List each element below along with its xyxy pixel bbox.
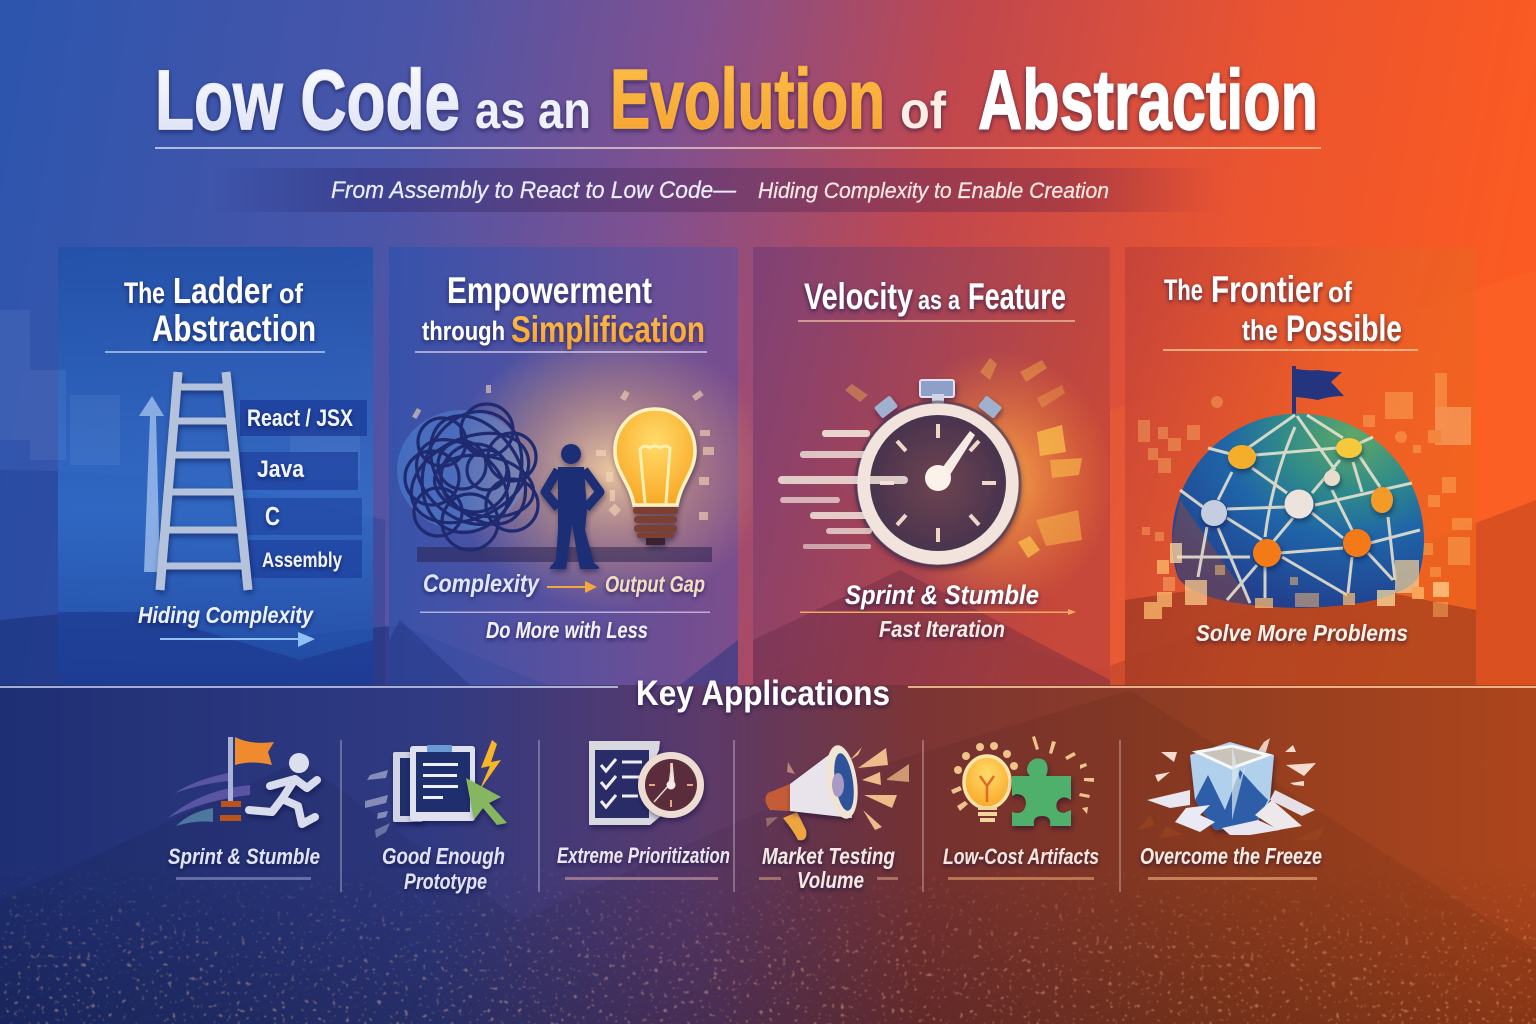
item: good enough prototype xyxy=(365,740,507,894)
item: market testing volume xyxy=(759,743,909,893)
item: low-cost artifacts xyxy=(943,736,1099,880)
heading: Feature xyxy=(968,276,1066,317)
panel: empowerment xyxy=(389,247,770,685)
label: Market Testing xyxy=(762,843,895,869)
title: of xyxy=(900,82,947,140)
label: Solve More Problems xyxy=(1196,620,1408,646)
pixel squares front xyxy=(1144,543,1449,619)
subtitle: Hiding Complexity to Enable Creation xyxy=(758,178,1109,203)
label xyxy=(382,843,505,894)
heading xyxy=(1164,269,1402,349)
heading: Abstraction xyxy=(152,308,316,349)
icon: cracked ice cube xyxy=(1138,738,1325,840)
icon: checklist and clock xyxy=(589,741,704,825)
label: hiding complexity: Hiding Complexity xyxy=(138,602,314,628)
heading xyxy=(422,270,705,350)
speed lines xyxy=(778,430,908,549)
shards xyxy=(845,358,1082,558)
pixel squares back xyxy=(1138,373,1472,577)
flag xyxy=(1292,366,1344,414)
labels: Complexity xyxy=(423,570,540,598)
subtitle: From Assembly to React to Low Code— xyxy=(331,177,737,204)
heading: of xyxy=(1328,277,1352,309)
title: Abstraction xyxy=(978,53,1318,147)
icon: stopwatch xyxy=(856,380,1020,566)
rung labels: C xyxy=(265,501,280,531)
label: Low-Cost Artifacts xyxy=(943,844,1099,869)
label: Extreme Prioritization xyxy=(557,843,730,868)
subtitle xyxy=(210,168,1220,212)
sparkles xyxy=(412,385,714,520)
panel: frontier xyxy=(1125,247,1476,685)
rung labels xyxy=(240,400,367,578)
item: extreme prioritization xyxy=(557,741,730,880)
rung labels: Java xyxy=(257,456,305,483)
icon: globe xyxy=(1172,366,1424,608)
heading: Ladder xyxy=(173,270,272,311)
ground band xyxy=(417,547,712,562)
heading: through xyxy=(422,316,505,346)
item: overcome the freeze xyxy=(1138,738,1325,880)
heading: Frontier xyxy=(1211,269,1323,310)
title: as an xyxy=(475,82,591,140)
heading: Possible xyxy=(1286,308,1402,349)
label: Sprint & Stumble xyxy=(168,844,320,869)
label: Overcome the Freeze xyxy=(1140,843,1322,869)
icon: clipboard xyxy=(365,740,507,838)
arrow xyxy=(160,632,315,647)
label: Volume xyxy=(797,867,864,893)
section: key applications xyxy=(0,674,1536,894)
icon: up arrow xyxy=(139,396,164,572)
title xyxy=(155,52,1318,147)
heading: Simplification xyxy=(511,309,705,350)
heading xyxy=(124,270,316,349)
nodes xyxy=(1201,438,1393,567)
labels: Sprint & Stumble xyxy=(845,580,1039,610)
label xyxy=(762,843,895,893)
heading: Key Applications xyxy=(636,674,890,713)
panel: empowerment: Do More with Less xyxy=(486,617,648,643)
icon: tangle xyxy=(397,397,545,550)
panel: velocity: Fast Iteration xyxy=(879,616,1005,642)
heading: The xyxy=(1164,274,1203,307)
icon: bulb and puzzle xyxy=(951,736,1094,826)
rung labels: React / JSX xyxy=(247,405,353,432)
heading: as a xyxy=(918,285,961,315)
icon: light bulb xyxy=(615,409,695,545)
panel: ladder of abstraction xyxy=(0,247,373,685)
heading: the xyxy=(1242,315,1278,347)
label: Prototype xyxy=(404,869,487,894)
icon: person xyxy=(545,444,600,569)
heading: Velocity xyxy=(804,276,913,317)
icon: runner and flag xyxy=(168,737,317,826)
label: Good Enough xyxy=(382,843,505,869)
heading: of xyxy=(279,278,304,309)
labels xyxy=(423,570,705,598)
heading: Empowerment xyxy=(447,270,652,311)
labels: Output Gap xyxy=(605,571,705,597)
network lines xyxy=(1177,415,1420,603)
icon: megaphone xyxy=(765,743,909,840)
heading: The xyxy=(124,277,165,310)
rung labels: Assembly xyxy=(262,549,342,572)
heading xyxy=(804,276,1066,317)
item: sprint and stumble xyxy=(168,737,320,880)
arrow xyxy=(547,581,597,593)
title: Low Code xyxy=(155,53,460,147)
title: Evolution xyxy=(610,52,885,146)
icon: ladder xyxy=(160,372,248,590)
panel: velocity xyxy=(753,247,1115,685)
